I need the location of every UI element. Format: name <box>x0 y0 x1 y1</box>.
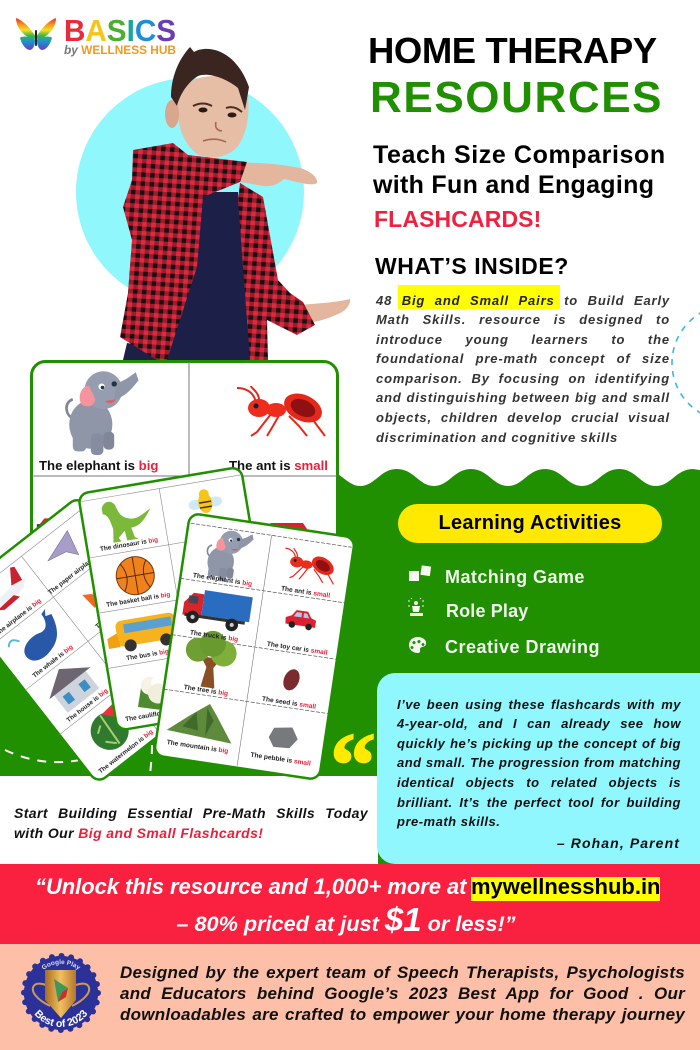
flashcards label: FLASHCARDS! <box>374 206 541 232</box>
logo <box>16 13 176 57</box>
description text: and distinguishing between big and small <box>376 390 670 405</box>
captions: The house is big <box>65 687 110 724</box>
captions <box>0 540 222 775</box>
house <box>38 653 104 717</box>
testimonial text: pre-math skills. <box>397 814 500 829</box>
captions: The ant is small <box>281 585 331 600</box>
captions: The seed is small <box>261 696 317 711</box>
description text: objects, children develop crucial visual <box>376 410 670 425</box>
description text: discrimination and cognitive skills <box>376 430 618 445</box>
activities pill <box>398 504 662 543</box>
testimonial text: brilliant. It’s the perfect tool for building <box>397 795 681 810</box>
offer line two: – 80% priced at just $1 or less!” <box>176 901 516 938</box>
captions: The watermelon is big <box>97 728 155 775</box>
captions: The mountain is big <box>166 739 229 755</box>
dinosaur <box>101 495 155 544</box>
raised hand <box>240 163 317 186</box>
icon: role play figure <box>408 598 424 616</box>
testimonial text: I’ve been using these flashcards with my <box>397 697 681 712</box>
school bus <box>105 612 179 655</box>
dashed circle accent <box>672 305 700 421</box>
captions: The basket ball is big <box>106 591 171 609</box>
card frame <box>0 496 225 784</box>
play triangle <box>54 979 68 1002</box>
elephant <box>203 528 254 585</box>
bee <box>186 487 224 516</box>
subtitle: with Fun and Engaging <box>373 170 654 198</box>
eyes and brows <box>193 104 242 112</box>
flashcard: rotated left card <box>0 496 225 784</box>
captions: The bus is big <box>126 648 169 662</box>
testimonial panel <box>377 673 700 864</box>
activity: creative drawing: Creative Drawing <box>445 637 600 657</box>
scalloped seal <box>24 956 98 1030</box>
navy t-shirt <box>123 192 251 360</box>
trophy handles <box>33 984 89 1006</box>
captions: The whale is big <box>31 644 75 680</box>
title line one: HOME THERAPY <box>368 30 657 71</box>
footer credentials text: downloadables are crafted to empower your home therapy journey <box>120 1005 685 1024</box>
shirt left panel and sleeve <box>120 143 247 360</box>
ant illustration <box>237 386 327 436</box>
offer line one: “Unlock this resource and 1,000+ more at <box>35 874 466 899</box>
brand wordmark: BASICS <box>64 13 176 48</box>
ant caption: The ant is small <box>229 458 328 473</box>
card frame <box>154 513 355 780</box>
icon: matching squares <box>409 565 431 581</box>
elephant illustration <box>66 371 138 455</box>
captions: The fish is small <box>94 594 138 630</box>
seed <box>280 666 303 694</box>
paper plane <box>41 530 83 572</box>
shirt right panel <box>238 183 315 360</box>
captions: The tree is big <box>183 684 229 698</box>
peach footer band <box>0 944 700 1050</box>
flashcard: front card <box>154 513 355 780</box>
cauliflower <box>133 672 174 713</box>
flashcard: middle card <box>78 467 280 731</box>
description text: foundational pre-math concept of size <box>376 351 670 366</box>
captions: The dinosaur is big <box>100 536 159 553</box>
description text: 48 Big and Small Pairs to Build Early <box>376 292 670 308</box>
face <box>178 76 249 157</box>
url highlight <box>471 877 660 901</box>
description text: introduce young learners to the <box>376 332 670 347</box>
icon: palette <box>409 637 426 653</box>
mountain <box>166 698 237 744</box>
car illustration <box>244 523 328 573</box>
captions: The paper airplane is small <box>47 540 116 596</box>
truck <box>181 587 253 634</box>
google play badge <box>21 953 101 1033</box>
truck illustration <box>29 511 151 577</box>
airplane <box>0 564 33 625</box>
card frame <box>32 362 338 602</box>
title line two: RESOURCES <box>370 73 663 122</box>
captions <box>96 536 190 723</box>
captions: The pebble is small <box>250 752 311 768</box>
testimonial text: 4-year-old, and I can already see how <box>397 716 681 731</box>
captions: The elephant is big <box>192 572 253 588</box>
hair <box>171 47 249 110</box>
child photo illustration <box>120 47 350 360</box>
toy car <box>284 609 317 631</box>
testimonial attribution: – Rohan, Parent <box>557 835 680 851</box>
summary highlight <box>398 285 560 309</box>
description text: comparison. By focusing on identifying <box>376 371 670 386</box>
description text: Math Skills. resource is designed to <box>376 312 670 327</box>
icon: butterfly <box>16 18 56 50</box>
footer credentials text: and Educators behind Google’s 2023 Best App for Good . Our <box>120 984 685 1003</box>
trophy shield <box>45 970 76 1018</box>
captions <box>166 572 336 768</box>
testimonial text: identical objects to related objects is <box>397 775 681 790</box>
activity: matching game: Matching Game <box>445 567 585 587</box>
dashed route line <box>5 745 152 790</box>
brand byline: by WELLNESS HUB <box>64 45 176 57</box>
basketball <box>113 554 157 598</box>
pebble <box>267 724 299 750</box>
subtitle <box>373 140 666 198</box>
badge bottom text: Best of 2023 <box>34 1010 87 1027</box>
quote mark: “ <box>330 714 376 816</box>
what's inside heading: WHAT’S INSIDE? <box>375 253 569 279</box>
activity: role play: Role Play <box>446 601 528 621</box>
elephant caption: The elephant is big <box>39 458 158 473</box>
captions: The cauliflower is big <box>125 706 190 723</box>
captions: The truck is big <box>189 629 239 643</box>
call to start text <box>14 805 368 841</box>
activities heading: Learning Activities <box>439 512 621 534</box>
card frame <box>78 467 280 731</box>
nose and mouth <box>203 122 226 142</box>
description text <box>376 292 670 445</box>
footer credentials text <box>120 963 686 1024</box>
subtitle: Teach Size Comparison <box>373 140 666 168</box>
captions: The toy car is small <box>266 641 328 657</box>
fish <box>82 577 116 609</box>
footer credentials text: Designed by the expert team of Speech Therapists, Psychologists <box>120 963 685 982</box>
cyan circle behind child <box>76 78 304 306</box>
red call-to-action band <box>0 864 700 944</box>
ant <box>281 547 339 585</box>
green wavy panel <box>0 469 700 864</box>
whale <box>4 608 70 671</box>
call to start text: Start Building Essential Pre-Math Skills Today <box>14 805 368 821</box>
testimonial text: quickly he’s picking up the concept of big <box>397 736 681 751</box>
tree <box>181 627 240 691</box>
ear <box>165 100 179 128</box>
testimonial text <box>396 697 682 829</box>
flashcard: large back card <box>29 362 337 602</box>
call to start text: with Our Big and Small Flashcards! <box>14 825 263 841</box>
testimonial text: and small. The progression from matching <box>397 755 681 770</box>
watermelon <box>82 700 140 758</box>
lower hand <box>292 299 350 323</box>
website link: mywellnesshub.in <box>471 874 660 899</box>
badge top text: Google Play <box>42 959 80 970</box>
